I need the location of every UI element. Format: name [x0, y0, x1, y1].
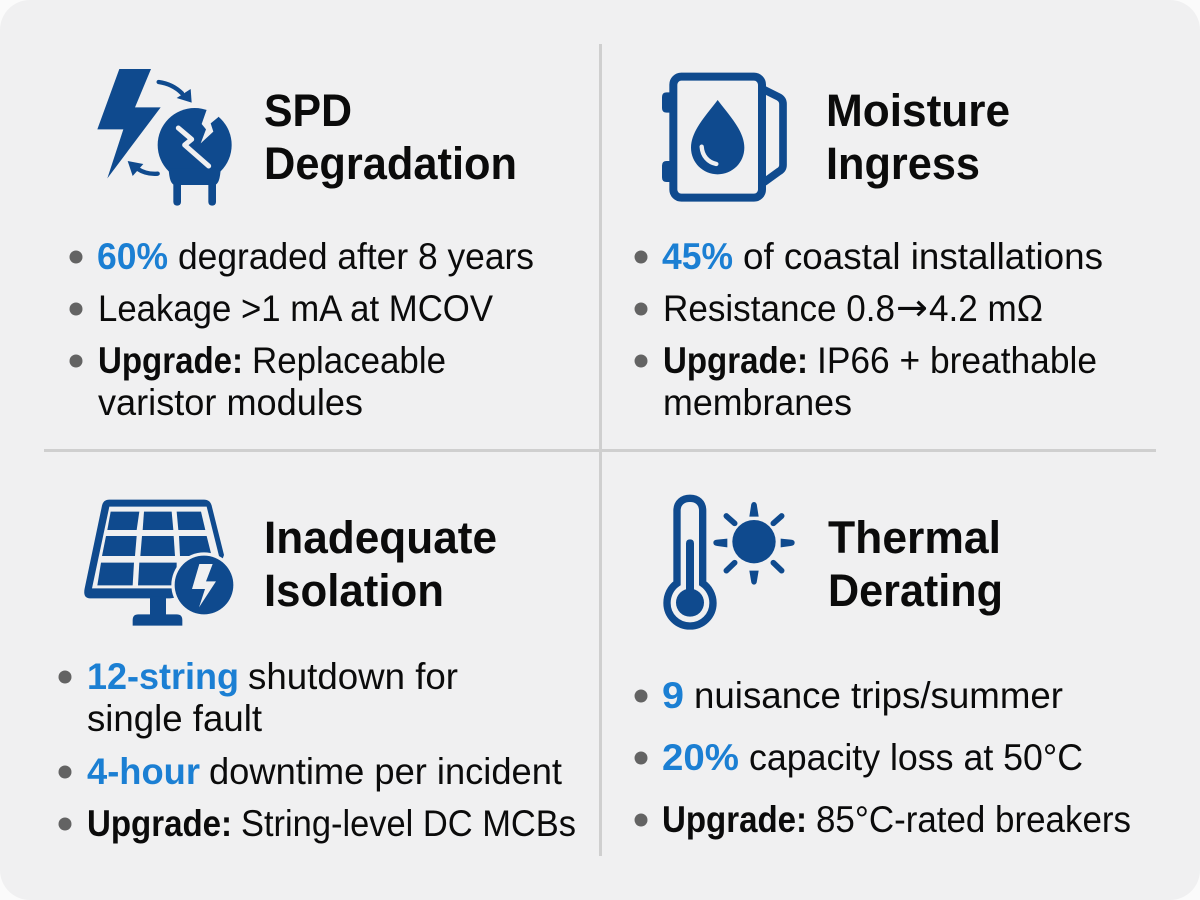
bullet list: Upgrade: — [98, 340, 243, 381]
panel: Inadequate Isolation — [58, 500, 576, 844]
icon: thermometer and sun — [667, 498, 795, 626]
heading: Thermal Derating: Derating — [828, 565, 1003, 616]
bullet list: nuisance trips/summer — [694, 675, 1063, 716]
bullet list: Upgrade: — [662, 799, 807, 840]
bullet list: single fault — [87, 698, 263, 739]
bullet list: Resistance 0.8 — [663, 288, 895, 329]
bullet list — [58, 656, 576, 844]
bullet list: Replaceable — [252, 340, 446, 381]
bullet list — [634, 236, 1103, 423]
heading: SPD Degradation: SPD — [264, 85, 352, 136]
bullet list: 4-hour — [87, 751, 200, 792]
bullet list: → — [896, 286, 928, 329]
bullet list: varistor modules — [98, 382, 363, 423]
bullet list: 4.2 mΩ — [929, 288, 1043, 329]
heading: Thermal Derating — [828, 512, 1003, 616]
heading: Moisture Ingress — [826, 85, 1010, 189]
icon: enclosure with water drop — [662, 77, 783, 198]
heading: SPD Degradation: Degradation — [264, 138, 517, 189]
panel: SPD Degradation — [70, 69, 534, 423]
heading: Moisture Ingress: Moisture — [826, 85, 1010, 136]
bullet list: 85°C-rated breakers — [816, 799, 1131, 840]
heading: Moisture Ingress: Ingress — [826, 138, 980, 189]
heading: Thermal Derating: Thermal — [828, 512, 1001, 563]
bullet list: 20% — [662, 737, 739, 778]
bullet list: IP66 + breathable — [817, 340, 1097, 381]
bullet list: 9 — [662, 675, 684, 716]
icon: solar panel with bolt badge — [84, 500, 237, 626]
bullet list: Upgrade: — [663, 340, 808, 381]
bullet list: capacity loss at 50°C — [749, 737, 1083, 778]
heading: Inadequate Isolation: Inadequate — [264, 512, 497, 563]
bullet list: of coastal installations — [743, 236, 1103, 277]
bullet list: downtime per incident — [209, 751, 563, 792]
bullet list — [70, 236, 534, 423]
bullet list: membranes — [663, 382, 852, 423]
bullet list: 60% — [97, 236, 168, 277]
bullet list: Upgrade: — [87, 803, 232, 844]
panel: Moisture Ingress — [634, 77, 1103, 423]
heading: Inadequate Isolation — [264, 512, 497, 616]
panel: Thermal Derating — [634, 498, 1131, 840]
icon: lightning and cracked varistor — [97, 69, 232, 206]
heading: SPD Degradation — [264, 85, 517, 189]
bullet list: 45% — [662, 236, 733, 277]
bullet list: degraded after 8 years — [178, 236, 534, 277]
bullet list: shutdown for — [248, 656, 458, 697]
bullet list: Leakage >1 mA at MCOV — [98, 288, 493, 329]
bullet list: String-level DC MCBs — [241, 803, 576, 844]
bullet list — [634, 675, 1131, 840]
bullet list: 12-string — [87, 656, 239, 697]
heading: Inadequate Isolation: Isolation — [264, 565, 444, 616]
